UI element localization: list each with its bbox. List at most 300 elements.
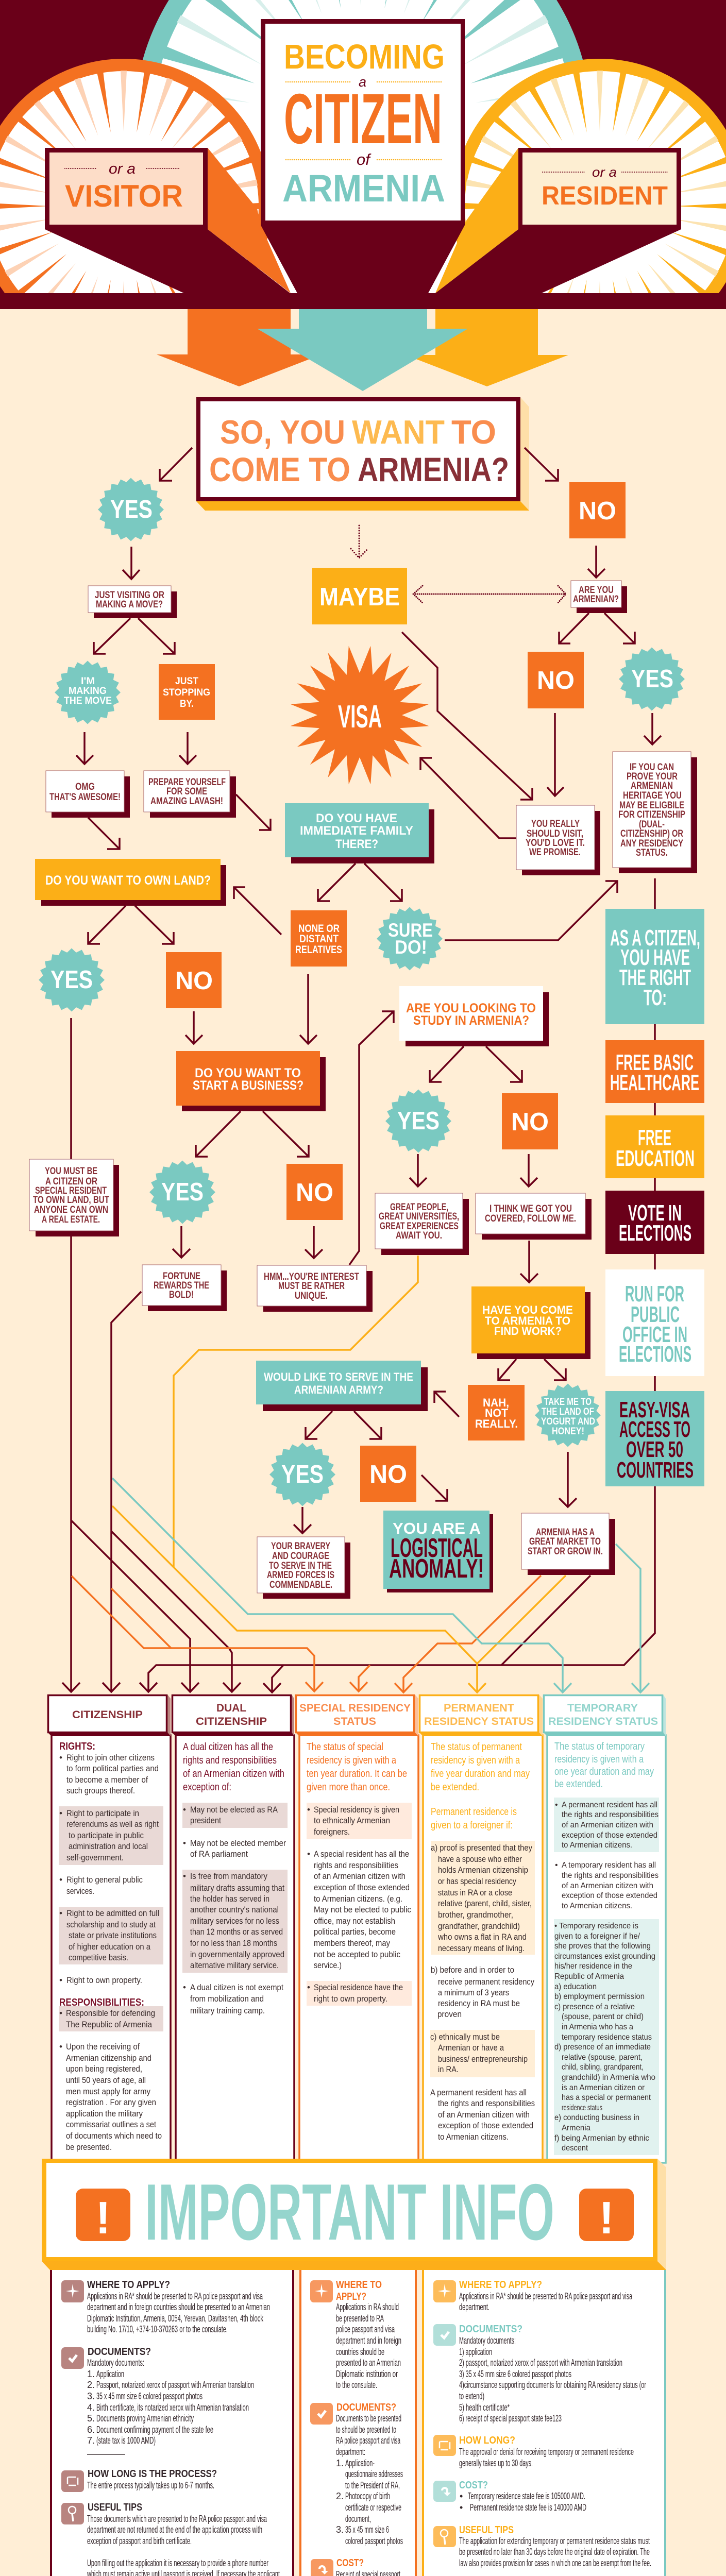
box: your bravery and courage: TO SERVE IN THE bbox=[269, 1561, 332, 1571]
heading: permanent residency status: RESIDENCY STATUS bbox=[424, 1716, 534, 1727]
list: temporary residency facts: has a special or permanent bbox=[562, 2093, 651, 2102]
text: where to apply: Diplomatic Institution, Armenia, 0054, Yerevan, Davitashen, 4th block bbox=[87, 2313, 264, 2324]
title: of with dotted rules: of bbox=[357, 150, 372, 168]
flow line: maroon into citizenship 1 bbox=[62, 1018, 80, 1692]
arrow: land left bbox=[88, 906, 126, 944]
list: citizen responsibilities: Responsible for defending bbox=[66, 2008, 155, 2018]
badge: yes 3 bbox=[39, 948, 105, 1011]
flow line: teal into temporary 2 bbox=[616, 1544, 649, 1692]
list: temporary residency facts: residence status bbox=[562, 2104, 602, 2112]
list: dual citizen exceptions: May not be elected member bbox=[190, 1838, 286, 1848]
list: citizen rights: services. bbox=[66, 1886, 94, 1896]
box: you are a logistical anomaly: YOU ARE A bbox=[393, 1519, 481, 1537]
arrow: maybe to really should visit bbox=[402, 632, 532, 800]
text: cost: Temporary residence state fee is 105000 AMD. bbox=[468, 2491, 585, 2501]
box: are you looking to study bbox=[399, 986, 549, 1046]
box: just visiting or making a move: MAKING A MOVE? bbox=[96, 599, 163, 610]
box: great people bbox=[375, 1193, 469, 1255]
box: you are a logistical anomaly: LOGISTICAL bbox=[391, 1533, 483, 1563]
box: are you looking to study: STUDY IN ARMENIA? bbox=[413, 1013, 529, 1028]
list: special residency facts: right to own property. bbox=[314, 1994, 387, 2004]
box: just stopping by: BY. bbox=[180, 699, 194, 709]
box: just stopping by: JUST bbox=[175, 676, 198, 687]
box: you are a logistical anomaly bbox=[383, 1511, 493, 1592]
box: armenia has a great market bbox=[521, 1513, 615, 1575]
banner: important info bbox=[42, 2159, 666, 2270]
heading: permanent residency status: PERMANENT bbox=[444, 1702, 514, 1714]
arrow: business right bbox=[263, 1111, 309, 1157]
box: great people: GREAT EXPERIENCES bbox=[380, 1221, 459, 1232]
list: temporary residency facts: given to a foreigner if he/ bbox=[554, 1932, 640, 1941]
panel: as a citizen you have the right to: TO: bbox=[644, 985, 667, 1010]
icon: where to apply bbox=[433, 2280, 456, 2302]
info column: residency bbox=[433, 2279, 652, 2576]
text: dual citizen intro: rights and responsibilities bbox=[183, 1755, 277, 1766]
header: gold sunburst wheel bbox=[459, 65, 726, 347]
box: if you can prove heritage: HERITAGE YOU bbox=[623, 790, 682, 801]
heading: dual citizenship: CITIZENSHIP bbox=[196, 1716, 267, 1727]
box: would like to serve in the army bbox=[256, 1361, 428, 1411]
arrow: land right bbox=[135, 906, 174, 944]
icon: how long cycle bbox=[433, 2435, 456, 2456]
arrow: hmm to study bbox=[349, 1011, 394, 1265]
arrow: should visit to visa bbox=[420, 758, 516, 838]
list: permanent residency conditions: a) proof is presented that they bbox=[431, 1843, 532, 1853]
heading: special residency status: SPECIAL RESIDENCY bbox=[299, 1702, 411, 1714]
badge: yes 3: YES bbox=[50, 966, 93, 994]
list: citizen rights: such groups thereof. bbox=[66, 1786, 135, 1795]
box: you really should visit: SHOULD VISIT, bbox=[527, 828, 583, 839]
list: temporary residency facts: relative (spouse, parent, bbox=[562, 2053, 643, 2062]
text: documents: 2. bbox=[87, 2380, 95, 2390]
list: citizen responsibilities bbox=[59, 2008, 162, 2152]
icon: exclamation left bbox=[76, 2189, 130, 2243]
text: dual citizen intro: exception of: bbox=[183, 1782, 231, 1793]
panel: run for public office in elections: PUBLIC bbox=[631, 1302, 680, 1327]
list: citizen rights: administration and local bbox=[69, 1841, 148, 1851]
icon: exclamation right: ! bbox=[599, 2192, 614, 2243]
badge: land of yogurt and honey: TAKE ME TO bbox=[544, 1397, 592, 1408]
list: temporary residency facts: she proves that the following bbox=[554, 1942, 651, 1951]
box: prepare yourself: FOR SOME bbox=[166, 786, 207, 797]
heading: special residency status bbox=[299, 1702, 411, 1727]
box: no 6: NO bbox=[369, 1461, 407, 1488]
list: dual citizen exceptions: in governmentally approved bbox=[190, 1950, 284, 1959]
box: hmm interest bbox=[257, 1265, 373, 1312]
badge: i'm making the move: I'M bbox=[81, 676, 95, 687]
list: temporary residency facts: descent bbox=[562, 2144, 588, 2153]
box: you must be a citizen to own land: A CITIZEN OR bbox=[45, 1176, 97, 1187]
text: documents: 6. bbox=[87, 2425, 95, 2435]
box: your bravery and courage: AND COURAGE bbox=[272, 1551, 329, 1562]
box: fortune rewards the bold: REWARDS THE bbox=[154, 1280, 209, 1291]
box: you really should visit: YOU REALLY bbox=[531, 819, 580, 829]
list: dual citizen exceptions: of RA parliament bbox=[190, 1849, 248, 1859]
text: permanent residency intro: five year duration and may bbox=[431, 1768, 530, 1780]
arrow: big teal bbox=[257, 309, 468, 391]
arrow: business yes down bbox=[173, 1226, 190, 1258]
list: permanent residency conditions: of an Armenian citizen with bbox=[438, 2110, 530, 2120]
box: no 5 bbox=[502, 1093, 558, 1149]
list: dual citizen exceptions: the holder has served in bbox=[190, 1894, 269, 1904]
text: where to apply: countries should be bbox=[336, 2347, 384, 2357]
box: i think we got you covered: I THINK WE GOT YOU bbox=[489, 1204, 572, 1214]
box: if you can prove heritage: PROVE YOUR bbox=[627, 771, 678, 782]
list: dual citizen exceptions: president bbox=[190, 1816, 221, 1825]
arrow: business left bbox=[196, 1111, 241, 1157]
icon: useful tips magnifier bbox=[61, 2503, 84, 2524]
flow line: maroon diagonal into dual 2 bbox=[111, 1531, 241, 1692]
box: have you come to find work: HAVE YOU COME bbox=[482, 1303, 573, 1316]
list: citizen responsibilities: upon being registered, bbox=[66, 2064, 142, 2074]
text: temporary residency intro bbox=[554, 1741, 654, 1790]
arrow: lavash to family bbox=[236, 794, 271, 830]
list: temporary residency facts: his/her residence in the bbox=[554, 1962, 632, 1971]
box: none or distant relatives: DISTANT bbox=[299, 933, 339, 945]
box: you must be a citizen to own land bbox=[29, 1159, 119, 1236]
list: dual citizen exceptions: • bbox=[183, 1871, 186, 1881]
arrow: moving down bbox=[76, 732, 93, 764]
arrow: no from question bbox=[525, 448, 558, 481]
resident box perspective shapes bbox=[435, 148, 681, 293]
icon: how long cycle bbox=[61, 2470, 84, 2492]
list: permanent residency conditions: exception of those extended bbox=[438, 2121, 533, 2130]
text: permanent residency intro: residency is given with a bbox=[431, 1755, 520, 1766]
list: special residency facts: of an Armenian citizen with bbox=[314, 1871, 406, 1881]
list: temporary residency facts: A permanent resident has all bbox=[562, 1801, 657, 1809]
list: dual citizen exceptions: A dual citizen is not exempt bbox=[190, 1982, 283, 1992]
box: you must be a citizen to own land: A REAL ESTATE. bbox=[42, 1214, 100, 1225]
arrow: family left bbox=[318, 863, 356, 901]
panel: or a visitor: VISITOR bbox=[65, 179, 183, 213]
box: would like to serve in the army: ARMENIAN ARMY? bbox=[294, 1383, 383, 1396]
box: just stopping by: STOPPING bbox=[163, 687, 210, 698]
box: just stopping by bbox=[159, 664, 215, 720]
header: orange sunburst wheel bbox=[0, 65, 265, 347]
text: cost: • bbox=[460, 2491, 463, 2501]
text: documents: Mandatory documents: bbox=[459, 2335, 516, 2346]
box: no 1: NO bbox=[579, 497, 616, 525]
text: documents: to extend) bbox=[459, 2391, 484, 2401]
box: maybe: MAYBE bbox=[319, 583, 400, 611]
text: temporary residency intro: The status of temporary bbox=[554, 1741, 645, 1752]
text: dual citizen intro: A dual citizen has all the bbox=[183, 1741, 273, 1753]
text: documents: Documents proving Armenian ethnicity bbox=[96, 2413, 194, 2424]
starburst: visa bbox=[291, 646, 429, 784]
panel: vote in elections bbox=[605, 1191, 704, 1254]
box: no 3: NO bbox=[175, 967, 213, 995]
list: permanent residency conditions: proven bbox=[437, 2009, 462, 2019]
box: are you armenian: ARE YOU bbox=[579, 585, 614, 596]
list: citizen responsibilities: Upon the receiving of bbox=[66, 2042, 140, 2052]
flow line: orange short into special residency bbox=[350, 1665, 370, 1691]
heading: dual citizenship bbox=[196, 1702, 267, 1727]
text: documents: 5) health certificate* bbox=[459, 2402, 510, 2413]
list: citizen responsibilities: be presented. bbox=[66, 2142, 112, 2152]
list: temporary residency facts: c) presence of a relative bbox=[554, 2003, 635, 2011]
list: permanent residency conditions: relative (parent, child, sister, bbox=[438, 1899, 532, 1908]
box: none or distant relatives bbox=[291, 910, 347, 967]
text: documents: to should be presented to bbox=[336, 2425, 396, 2435]
flow line: orange into special residency bbox=[72, 1576, 323, 1691]
title: citizen: CITIZEN bbox=[284, 79, 442, 159]
list: citizen rights: • bbox=[59, 1753, 62, 1762]
badge: yes 5: YES bbox=[397, 1107, 440, 1135]
text: dual citizen intro bbox=[183, 1741, 284, 1793]
text: useful tips: USEFUL TIPS bbox=[88, 2502, 142, 2513]
list: temporary residency facts: a) education bbox=[554, 1982, 597, 1991]
list: permanent residency conditions: c) ethnically must be bbox=[430, 2032, 500, 2042]
arrow: study right bbox=[486, 1046, 522, 1082]
list: permanent residency conditions: to Armenian citizens. bbox=[438, 2132, 509, 2142]
title: armenia: ARMENIA bbox=[282, 167, 445, 210]
list: citizen responsibilities: registration . For any given bbox=[66, 2097, 156, 2107]
panel: as a citizen you have the right to bbox=[605, 909, 704, 1024]
text: permanent residency intro: be extended. bbox=[431, 1782, 479, 1793]
list: dual citizen exceptions: military services for no less bbox=[190, 1916, 279, 1926]
icon: documents check bbox=[310, 2403, 333, 2425]
list: citizen responsibilities: • bbox=[59, 2008, 62, 2018]
box: you must be a citizen to own land: YOU MUST BE bbox=[45, 1166, 97, 1177]
list: dual citizen exceptions: than 12 months or as served bbox=[190, 1927, 283, 1937]
arrow: nah to army bbox=[434, 1392, 459, 1417]
list: citizen rights: self-government. bbox=[66, 1853, 124, 1862]
text: useful tips: USEFUL TIPS bbox=[459, 2524, 514, 2536]
text: documents: DOCUMENTS? bbox=[336, 2402, 396, 2413]
box: do you want to start a business bbox=[176, 1051, 326, 1111]
list: permanent residency conditions: A permanent resident has all bbox=[430, 2088, 527, 2097]
text: how long: HOW LONG? bbox=[459, 2435, 515, 2446]
text: where to apply: department. bbox=[459, 2302, 489, 2312]
text: where to apply bbox=[336, 2279, 401, 2390]
arrow: yes from question bbox=[160, 448, 192, 481]
box: no 1 bbox=[569, 482, 626, 538]
list: dual citizen exceptions: May not be elected as RA bbox=[190, 1805, 278, 1815]
arrow: armenian left bbox=[559, 613, 589, 643]
panel: important info columns backgrounds bbox=[51, 2267, 665, 2576]
list: special residency facts: members thereof, may bbox=[314, 1938, 390, 1948]
badge: yes 5 bbox=[385, 1090, 451, 1153]
panel: free basic healthcare bbox=[605, 1040, 704, 1103]
heading: dual citizenship: DUAL bbox=[216, 1702, 246, 1714]
flow line: maroon diagonal into dual 1 bbox=[71, 1520, 199, 1692]
box: if you can prove heritage: ANY RESIDENCY bbox=[620, 838, 683, 849]
list: citizen rights: Right to own property. bbox=[66, 1975, 142, 1985]
list: special residency facts: to ethnically Armenian bbox=[314, 1816, 390, 1825]
list: temporary residency facts: of an Armenian citizen with bbox=[562, 1882, 653, 1890]
list: permanent residency conditions: b) before and in order to bbox=[431, 1965, 514, 1975]
list: special residency facts: service.) bbox=[314, 1960, 342, 1970]
list: dual citizen exceptions: Is free from mandatory bbox=[190, 1871, 267, 1881]
box: are you looking to study: ARE YOU LOOKING TO bbox=[406, 1001, 536, 1015]
list: special residency facts: to Armenian citizens. (e.g. bbox=[314, 1894, 402, 1904]
panel: free education bbox=[605, 1115, 704, 1178]
list: citizen rights: Right to be admitted on full bbox=[66, 1908, 159, 1918]
badge: land of yogurt and honey bbox=[535, 1384, 601, 1447]
list: temporary residency facts: f) being Armenian by ethnic bbox=[554, 2134, 649, 2143]
text: documents: Photocopy of birth bbox=[345, 2491, 390, 2501]
heading: responsibilities: RESPONSIBILITIES: bbox=[59, 1997, 144, 2008]
text: documents: 5. bbox=[87, 2413, 95, 2424]
list: temporary residency facts: is an Armenian citizen or bbox=[562, 2083, 645, 2092]
list: temporary residency facts: d) presence of an immediate bbox=[554, 2043, 651, 2052]
box: your bravery and courage bbox=[257, 1537, 350, 1599]
box: just visiting or making a move bbox=[88, 586, 177, 618]
text: special residency intro: given more than once. bbox=[307, 1782, 390, 1793]
list: permanent residency conditions: status in RA or a close bbox=[438, 1888, 512, 1897]
box: prepare yourself: AMAZING LAVASH! bbox=[150, 796, 223, 807]
text: documents: 7. bbox=[87, 2435, 95, 2446]
panel: temporary residency column bbox=[543, 1694, 666, 2163]
text: documents: Documents to be presented bbox=[336, 2413, 401, 2424]
list: permanent residency conditions: a minimum of 3 years bbox=[438, 1988, 509, 1997]
text: where to apply: Applications in RA should bbox=[336, 2302, 399, 2312]
list: citizen rights: referendums as well as right bbox=[66, 1819, 159, 1829]
list: permanent residency conditions: business/ entrepreneurship bbox=[438, 2054, 528, 2064]
arrow: maybe dotted bbox=[351, 526, 368, 558]
text: documents: colored passport photos bbox=[345, 2536, 403, 2546]
box: nah not really bbox=[468, 1385, 525, 1440]
arrow: yogurt to market bbox=[559, 1452, 577, 1507]
arrow: work left bbox=[498, 1359, 516, 1380]
list: citizen rights: • bbox=[59, 1975, 62, 1985]
list: citizen responsibilities: men must apply for army bbox=[66, 2087, 150, 2096]
panel: so you want to come to armenia: SO, YOU bbox=[220, 413, 345, 451]
list: dual citizen exceptions: • bbox=[183, 1838, 186, 1848]
text: how long bbox=[459, 2435, 634, 2468]
box: none or distant relatives: NONE OR bbox=[298, 923, 340, 935]
text: documents bbox=[459, 2324, 646, 2424]
text: documents: Passport, notarized xerox of passport with Armenian translation bbox=[96, 2380, 254, 2390]
panel: or a resident bbox=[518, 148, 681, 229]
box: if you can prove heritage: MAY BE ELIGBILE bbox=[619, 800, 684, 811]
text: permanent residency intro: given to a foreigner if: bbox=[431, 1820, 513, 1831]
list: special residency facts: political parties, become bbox=[314, 1927, 396, 1937]
arrow: army right bbox=[354, 1411, 381, 1439]
arrow: follow me to find work bbox=[520, 1241, 538, 1282]
box: omg that's awesome: OMG bbox=[75, 782, 95, 792]
list: dual citizen exceptions bbox=[183, 1805, 286, 2015]
panel: or a resident: RESIDENT bbox=[542, 181, 668, 210]
text: how long: generally takes up to 30 days. bbox=[459, 2458, 533, 2468]
list: citizen rights: state or private institutions bbox=[69, 1930, 157, 1940]
box: you must be a citizen to own land: TO OWN LAND, BUT bbox=[33, 1195, 109, 1206]
shaded bands bbox=[554, 1798, 659, 2155]
panel: or a resident: or a bbox=[592, 164, 617, 180]
list: temporary residency facts: grandchild) in Armenia who bbox=[562, 2073, 655, 2082]
icon: where to apply bbox=[310, 2280, 333, 2302]
icon: exclamation left: ! bbox=[95, 2192, 111, 2243]
list: permanent residency conditions: in RA. bbox=[438, 2064, 459, 2074]
box: maybe bbox=[312, 568, 407, 624]
box: have you come to find work: TO ARMENIA TO bbox=[485, 1314, 570, 1327]
shaded bands bbox=[182, 1803, 288, 1973]
flow line: teal into temporary 1 bbox=[112, 1478, 571, 1692]
icon: exclamation right bbox=[579, 2189, 634, 2243]
arrow: yes down bbox=[123, 547, 140, 579]
list: permanent residency conditions: who owns a flat in RA and bbox=[437, 1932, 527, 1942]
flow line: maroon into dual 3 bbox=[263, 1665, 283, 1692]
list: special residency facts bbox=[307, 1805, 411, 2004]
list: citizen responsibilities: • bbox=[59, 2042, 62, 2052]
box: if you can prove heritage: ARMENIAN bbox=[631, 781, 673, 791]
badge: land of yogurt and honey: HONEY! bbox=[552, 1426, 584, 1437]
list: citizen rights: of higher education on a bbox=[69, 1942, 150, 1952]
panel: citizenship column bbox=[47, 1694, 171, 2163]
text: temporary residency intro: be extended. bbox=[554, 1778, 603, 1790]
badge: yes 6: YES bbox=[281, 1461, 324, 1488]
badge: yes 6 bbox=[269, 1443, 335, 1506]
box: you are a logistical anomaly: ANOMALY! bbox=[389, 1554, 484, 1584]
box: would like to serve in the army: WOULD LIKE TO SERVE IN THE bbox=[264, 1370, 413, 1383]
arrow: work right bbox=[544, 1359, 566, 1380]
text: temporary residency intro: residency is given with a bbox=[554, 1754, 644, 1765]
list: temporary residency facts: A temporary resident has all bbox=[562, 1861, 656, 1870]
list: permanent residency conditions: Armenian or have a bbox=[438, 2043, 504, 2053]
panel: easy-visa access to over 50 countries bbox=[605, 1391, 704, 1486]
text: where to apply: WHERE TO APPLY? bbox=[87, 2279, 170, 2291]
flow line: maroon from market bbox=[501, 1575, 590, 1665]
box: omg that's awesome bbox=[46, 771, 130, 818]
badge: land of yogurt and honey: THE LAND OF bbox=[542, 1406, 594, 1417]
flow line: gold from great people bbox=[174, 1256, 418, 1567]
panel: dual citizenship column bbox=[172, 1694, 294, 2163]
arrow: no to anomaly bbox=[421, 1475, 447, 1501]
box: do you want to start a business: START A BUSINESS? bbox=[193, 1078, 303, 1093]
badge: i'm making the move bbox=[55, 661, 121, 724]
list: temporary residency facts: • Temporary residence is bbox=[554, 1922, 638, 1930]
text: documents: 2) passport, notarized xerox of passport with Armenian translation bbox=[459, 2358, 622, 2368]
text: where to apply: building No. 17/10, +374-10-370263 or to the consulate. bbox=[87, 2324, 228, 2334]
box: do you have immediate family: IMMEDIATE FAMILY bbox=[300, 824, 413, 838]
list: citizen rights: Right to join other citizens bbox=[66, 1753, 155, 1762]
panel: so you want to come to armenia bbox=[196, 397, 529, 511]
text: documents: questionnaire addresses bbox=[345, 2469, 403, 2479]
panel: so you want to come to armenia: WANT bbox=[352, 413, 445, 451]
list: citizen rights: • bbox=[59, 1875, 62, 1885]
list: dual citizen exceptions: military training camp. bbox=[190, 2006, 265, 2015]
icon: documents check bbox=[61, 2347, 84, 2369]
list: temporary residency facts: in Armenia who has a bbox=[562, 2023, 633, 2031]
box: nah not really: REALLY. bbox=[475, 1417, 518, 1430]
text: cost bbox=[336, 2557, 400, 2576]
icon: useful tips magnifier bbox=[433, 2526, 456, 2547]
box: if you can prove heritage: IF YOU CAN bbox=[630, 762, 674, 773]
text: where to apply bbox=[87, 2279, 270, 2334]
arrow: family right bbox=[364, 863, 402, 901]
box: no 6 bbox=[360, 1446, 416, 1502]
badge: sure do: DO! bbox=[395, 937, 427, 958]
text: cost: Permanent residence state fee is 140000 AMD bbox=[470, 2502, 586, 2513]
box: you really should visit: WE PROMISE. bbox=[529, 847, 581, 858]
icon: cost bbox=[433, 2481, 456, 2502]
heading: rights: RIGHTS: bbox=[59, 1741, 95, 1752]
box: no 3 bbox=[166, 952, 222, 1008]
box: armenia has a great market: GREAT MARKET TO bbox=[529, 1536, 601, 1547]
arrow: armenian right bbox=[604, 613, 635, 643]
arrow: army left bbox=[306, 1411, 332, 1439]
list: special residency facts: not be accepted to public bbox=[314, 1950, 400, 1959]
box: if you can prove heritage: FOR CITIZENSHIP bbox=[618, 809, 685, 820]
flow line: gold into permanent residency bbox=[112, 1506, 566, 1692]
panel: permanent residency column bbox=[419, 1694, 543, 2163]
list: citizen rights bbox=[59, 1753, 159, 1985]
heading: temporary residency status: TEMPORARY bbox=[567, 1702, 638, 1714]
list: permanent residency conditions: necessary means of living. bbox=[438, 1943, 525, 1953]
heading: permanent residency status bbox=[424, 1702, 534, 1727]
list: special residency facts: • bbox=[307, 1849, 310, 1859]
panel: free education: FREE bbox=[638, 1125, 671, 1150]
